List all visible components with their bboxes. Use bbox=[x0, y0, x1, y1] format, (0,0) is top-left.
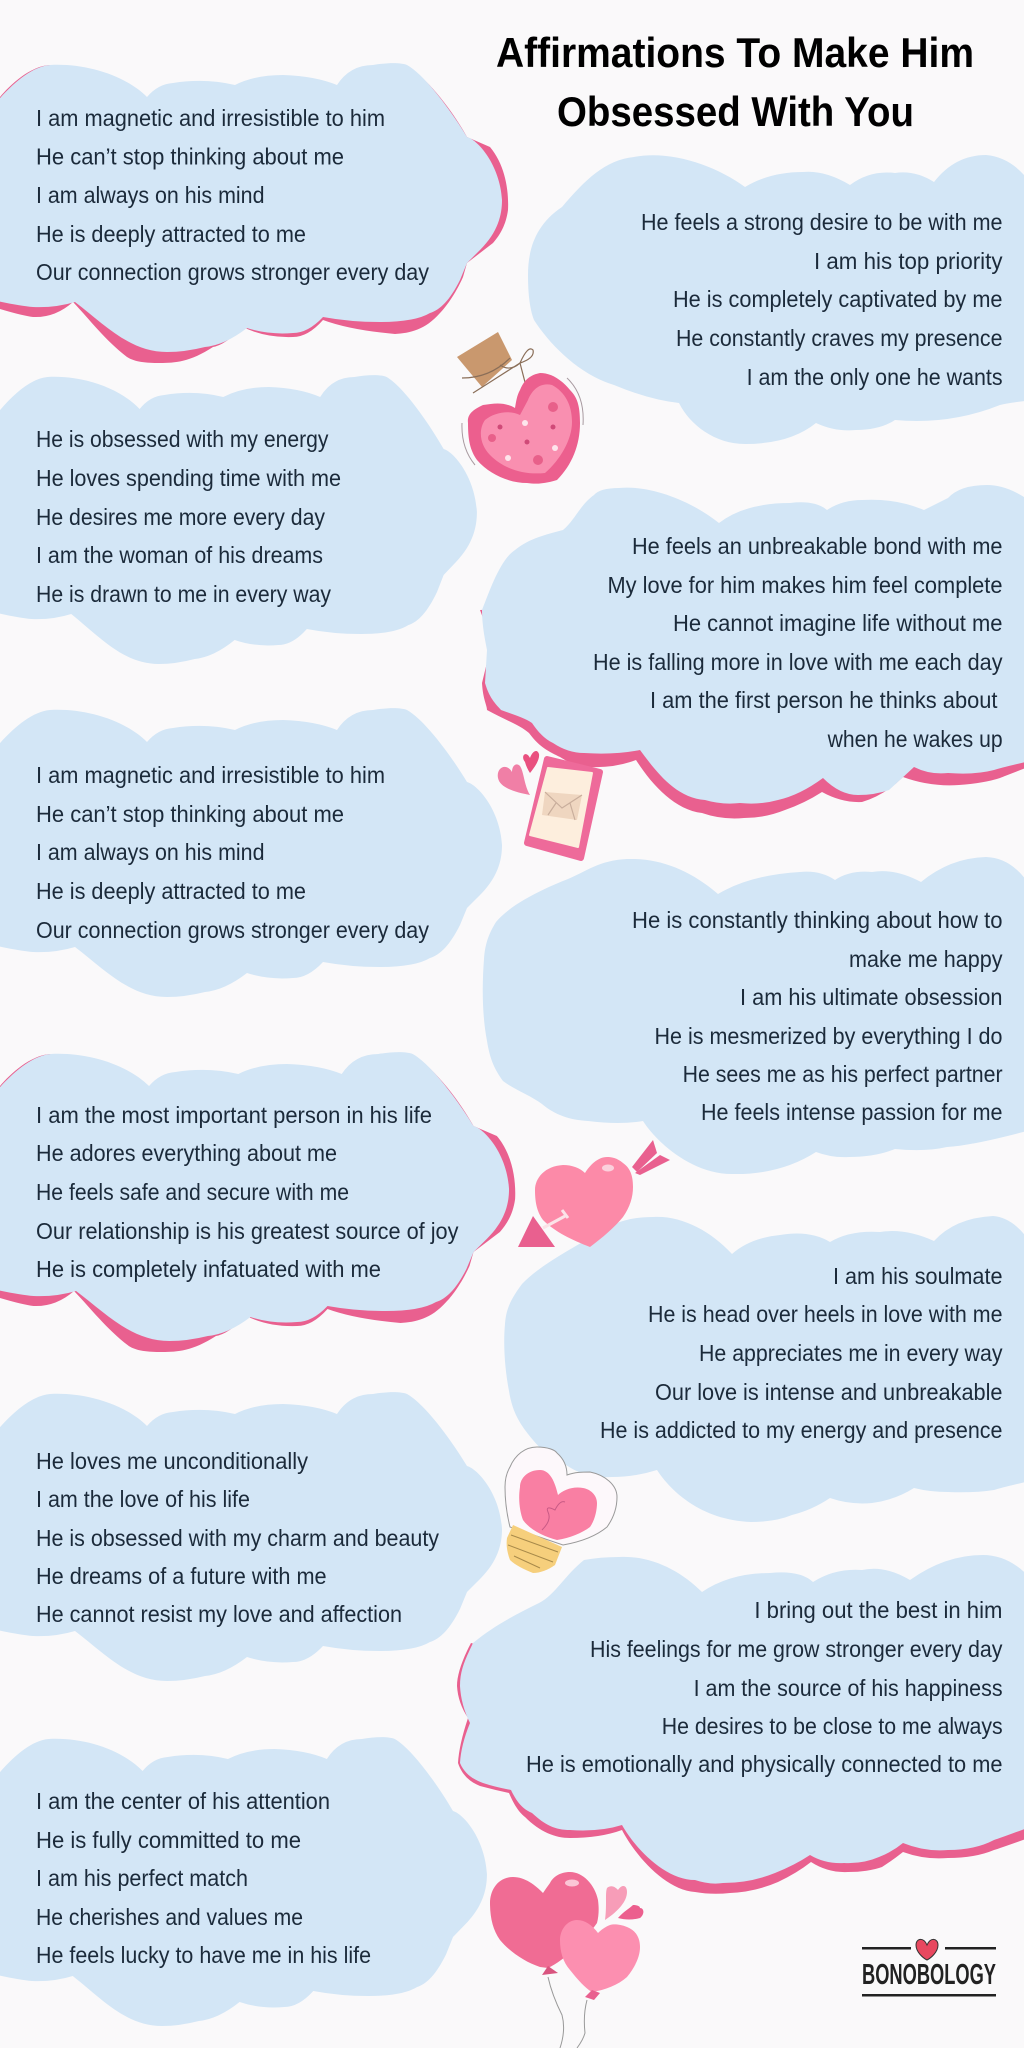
affirmations text: He is completely captivated by me bbox=[673, 286, 1002, 312]
cloud shape bbox=[0, 63, 502, 352]
affirmations text: make me happy bbox=[849, 946, 1003, 972]
affirmations text bbox=[600, 1263, 1003, 1443]
cloud shape bbox=[528, 155, 1024, 444]
affirmations text: Our love is intense and unbreakable bbox=[655, 1379, 1002, 1405]
affirmations text: He loves me unconditionally bbox=[36, 1448, 308, 1474]
cloud shape bbox=[0, 1392, 502, 1681]
affirmations text: I am the only one he wants bbox=[747, 364, 1003, 390]
affirmations text: I am his ultimate obsession bbox=[740, 984, 1002, 1010]
title: Affirmations To Make Him bbox=[496, 29, 974, 76]
panel: cloud right 2 bbox=[480, 485, 1024, 818]
affirmations text bbox=[36, 1448, 439, 1627]
affirmations text: Our connection grows stronger every day bbox=[36, 917, 429, 943]
affirmations text: He is head over heels in love with me bbox=[648, 1301, 1002, 1327]
panel: cloud right 4 bbox=[504, 1216, 1024, 1522]
title bbox=[496, 29, 974, 135]
affirmations text: He is deeply attracted to me bbox=[36, 878, 306, 904]
affirmations text: I am his perfect match bbox=[36, 1865, 248, 1891]
affirmations text bbox=[641, 209, 1003, 390]
affirmations text: He is deeply attracted to me bbox=[36, 221, 306, 247]
affirmations text bbox=[36, 426, 341, 607]
affirmations text: He feels intense passion for me bbox=[701, 1099, 1002, 1125]
affirmations text: I am the center of his attention bbox=[36, 1788, 330, 1814]
affirmations text bbox=[36, 762, 429, 943]
panel: cloud left 5 bbox=[0, 1392, 502, 1681]
affirmations text bbox=[632, 907, 1003, 1125]
affirmations text: He sees me as his perfect partner bbox=[683, 1061, 1003, 1087]
affirmations text: He loves spending time with me bbox=[36, 465, 341, 491]
affirmations text: He feels lucky to have me in his life bbox=[36, 1942, 371, 1968]
affirmations text: He is addicted to my energy and presence bbox=[600, 1417, 1002, 1443]
affirmations text: I am magnetic and irresistible to him bbox=[36, 762, 385, 788]
affirmations text: I am magnetic and irresistible to him bbox=[36, 105, 385, 131]
icon: phone with hearts bbox=[498, 751, 600, 858]
affirmations text: I bring out the best in him bbox=[754, 1597, 1002, 1623]
icon: heart light bulb bbox=[505, 1447, 617, 1573]
logo heart bbox=[916, 1939, 938, 1960]
affirmations text: I am always on his mind bbox=[36, 182, 264, 208]
affirmations text: I am the woman of his dreams bbox=[36, 542, 323, 568]
affirmations text: Our relationship is his greatest source of joy bbox=[36, 1218, 459, 1244]
panel: cloud right 3 bbox=[483, 857, 1024, 1174]
affirmations text: He is emotionally and physically connected to me bbox=[526, 1751, 1002, 1777]
affirmations text: He appreciates me in every way bbox=[699, 1340, 1003, 1366]
cloud shadow bbox=[0, 65, 508, 363]
affirmations text: He is obsessed with my energy bbox=[36, 426, 329, 452]
cloud shape bbox=[0, 1737, 487, 2026]
cloud shape bbox=[460, 1555, 1024, 1884]
icon: heart bottle bbox=[457, 332, 583, 484]
panel: cloud left 4 bbox=[0, 1052, 515, 1352]
affirmations text: He feels an unbreakable bond with me bbox=[632, 533, 1002, 559]
cloud shadow bbox=[480, 600, 1024, 818]
affirmations text: He cannot imagine life without me bbox=[673, 610, 1002, 636]
affirmations text: Our connection grows stronger every day bbox=[36, 259, 429, 285]
affirmations text: I am his top priority bbox=[814, 248, 1003, 274]
affirmations text: He feels safe and secure with me bbox=[36, 1179, 349, 1205]
affirmations text: He desires to be close to me always bbox=[662, 1713, 1003, 1739]
panel: cloud left 2 bbox=[0, 375, 477, 664]
affirmations text bbox=[36, 1102, 459, 1282]
affirmations text: He feels a strong desire to be with me bbox=[641, 209, 1002, 235]
cloud shape bbox=[0, 708, 502, 997]
affirmations text: I am the most important person in his life bbox=[36, 1102, 432, 1128]
cloud shape bbox=[0, 375, 477, 664]
affirmations text: He cannot resist my love and affection bbox=[36, 1601, 402, 1627]
panel: cloud left 1 bbox=[0, 63, 508, 363]
cloud shadow bbox=[457, 1643, 1024, 1894]
panel: cloud right 5 bbox=[457, 1555, 1024, 1894]
affirmations text: He dreams of a future with me bbox=[36, 1563, 327, 1589]
panel: cloud left 3 bbox=[0, 708, 502, 997]
affirmations text: I am always on his mind bbox=[36, 839, 264, 865]
affirmations text: He is fully committed to me bbox=[36, 1827, 301, 1853]
affirmations text: He is constantly thinking about how to bbox=[632, 907, 1002, 933]
affirmations text: He can’t stop thinking about me bbox=[36, 801, 344, 827]
affirmations text: I am the love of his life bbox=[36, 1486, 250, 1512]
affirmations text bbox=[593, 533, 1003, 752]
affirmations text: He adores everything about me bbox=[36, 1140, 337, 1166]
affirmations text bbox=[36, 105, 429, 285]
affirmations text: He desires me more every day bbox=[36, 504, 325, 530]
affirmations text: He is drawn to me in every way bbox=[36, 581, 331, 607]
title: Obsessed With You bbox=[557, 88, 914, 135]
affirmations text bbox=[526, 1597, 1003, 1777]
logo: Bonobology bbox=[862, 1939, 996, 1996]
affirmations text: He is mesmerized by everything I do bbox=[654, 1023, 1002, 1049]
panel: cloud right 1 bbox=[528, 155, 1024, 444]
cloud shape bbox=[504, 1216, 1024, 1522]
cloud shape bbox=[0, 1052, 509, 1341]
affirmations text: when he wakes up bbox=[827, 726, 1003, 752]
affirmations text: He constantly craves my presence bbox=[676, 325, 1002, 351]
icon: heart with arrow bbox=[518, 1140, 670, 1247]
affirmations text: My love for him makes him feel complete bbox=[608, 572, 1002, 598]
affirmations text: He is completely infatuated with me bbox=[36, 1256, 381, 1282]
panel: cloud left 6 bbox=[0, 1737, 487, 2026]
affirmations text bbox=[36, 1788, 371, 1968]
affirmations text: I am the first person he thinks about bbox=[650, 687, 998, 713]
affirmations text: He cherishes and values me bbox=[36, 1904, 303, 1930]
affirmations text: I am his soulmate bbox=[833, 1263, 1002, 1289]
affirmations text: He is falling more in love with me each day bbox=[593, 649, 1003, 675]
affirmations text: He is obsessed with my charm and beauty bbox=[36, 1525, 439, 1551]
cloud shape bbox=[483, 857, 1024, 1174]
cloud shadow bbox=[0, 1054, 515, 1352]
affirmations text: He can’t stop thinking about me bbox=[36, 144, 344, 170]
cloud shape bbox=[482, 485, 1024, 804]
icon: heart balloons bbox=[490, 1872, 643, 2048]
affirmations text: His feelings for me grow stronger every day bbox=[590, 1636, 1003, 1662]
affirmations text: I am the source of his happiness bbox=[694, 1675, 1003, 1701]
